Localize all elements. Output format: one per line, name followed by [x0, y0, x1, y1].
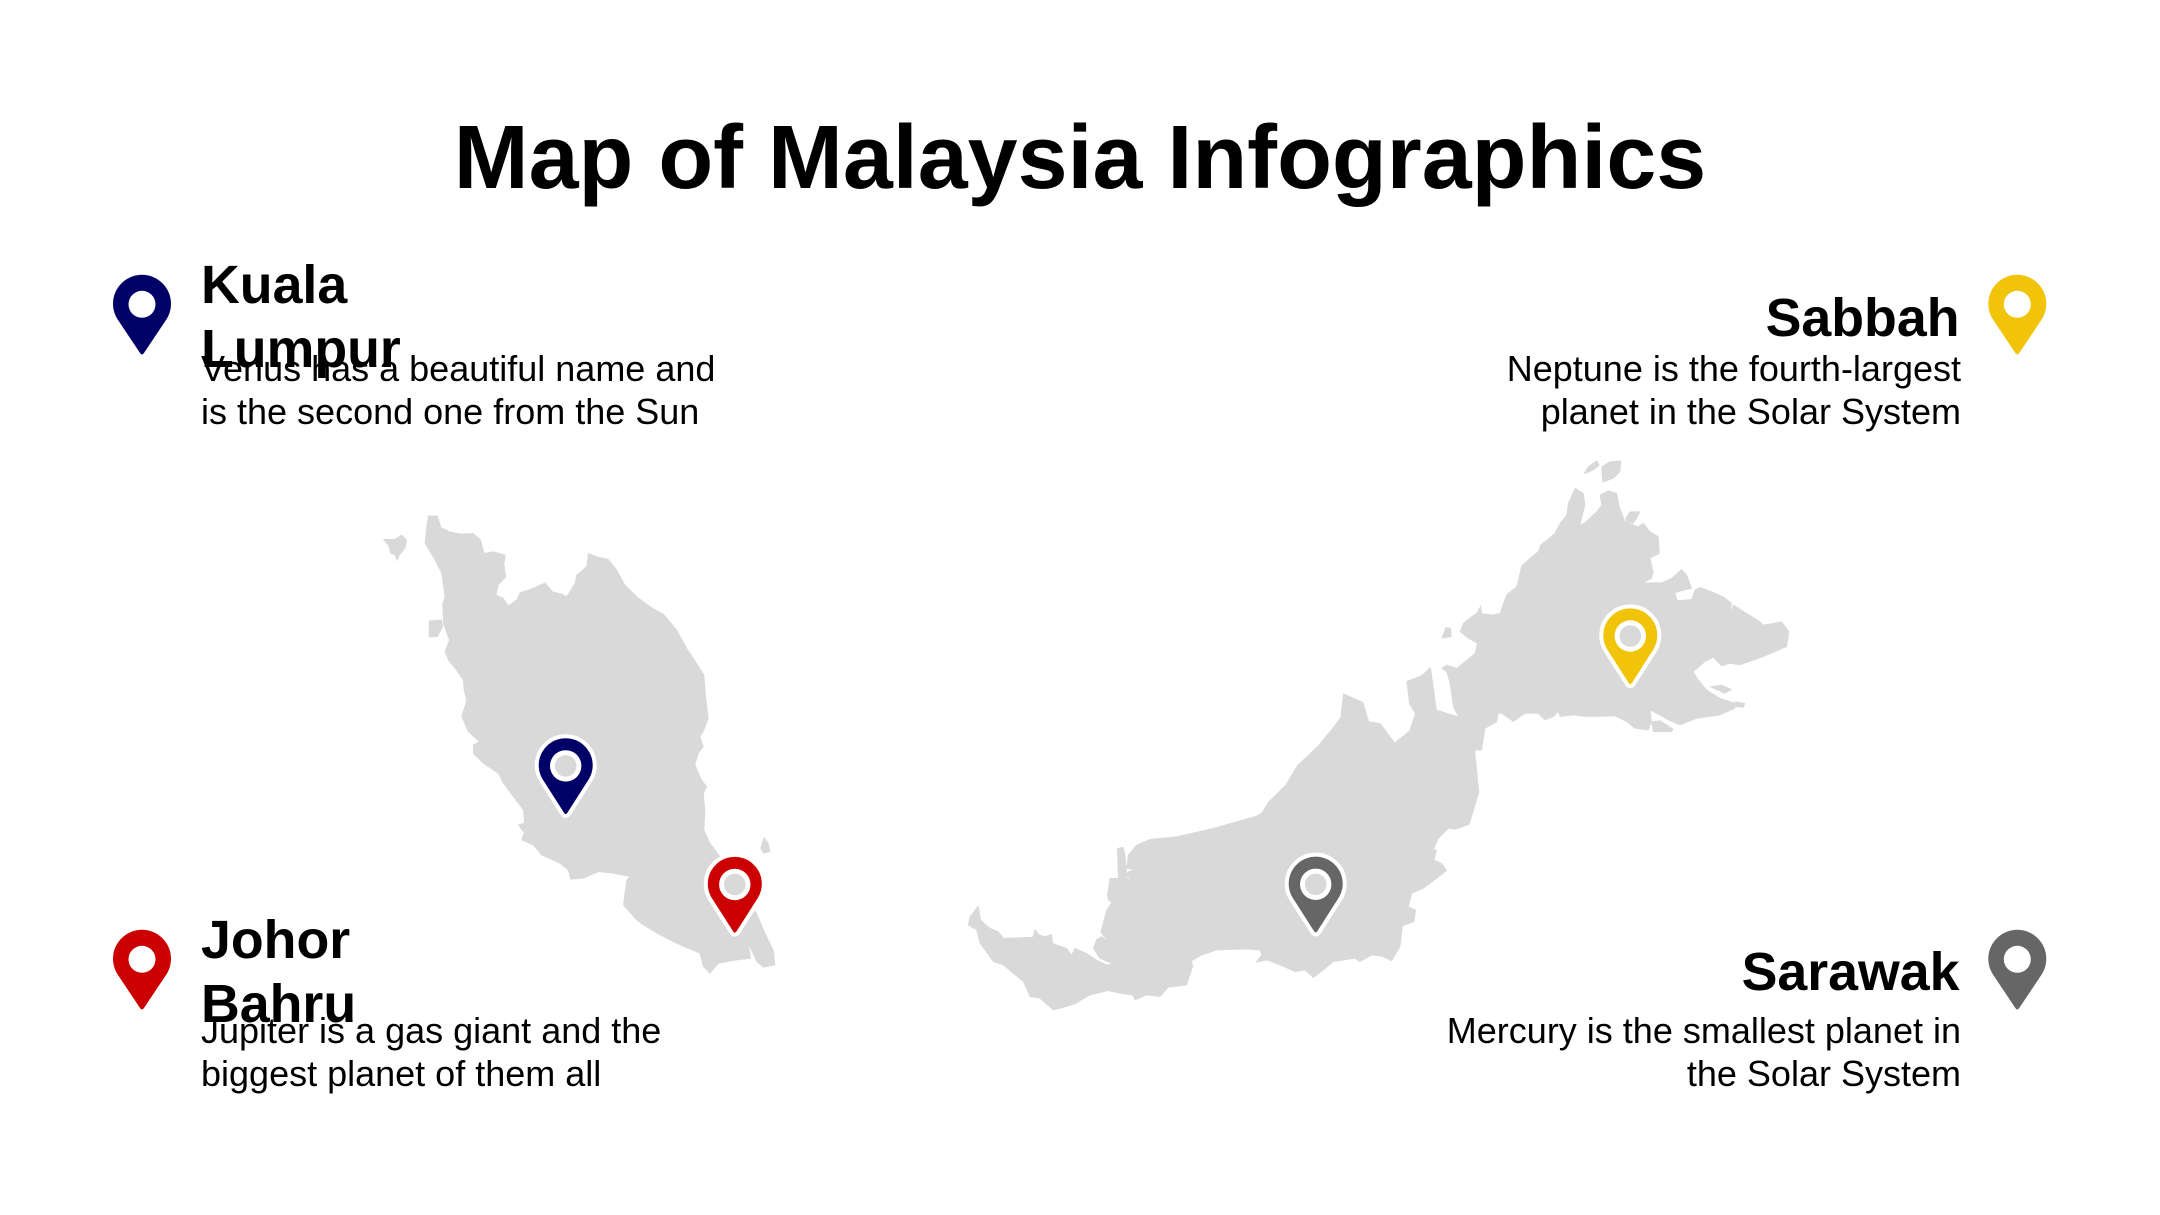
map pin: Sabbah	[1603, 608, 1657, 684]
panel: Kuala Lumpur	[113, 255, 715, 432]
text: Kuala Lumpur description: Venus has a beautiful name and	[201, 348, 715, 389]
text: Johor Bahru description: biggest planet of them all	[201, 1053, 601, 1094]
heading: Johor Bahru: Bahru	[201, 974, 356, 1034]
map pin: Sarawak	[1289, 857, 1343, 932]
map: East Malaysia	[968, 461, 1789, 1010]
map pin: Johor Bahru	[708, 857, 762, 933]
icon: red pin	[113, 930, 171, 1010]
title: Map of Malaysia Infographics	[454, 108, 1706, 208]
heading: Sabbah: Sabbah	[1766, 288, 1960, 348]
text: Sabbah description: planet in the Solar System	[1541, 391, 1961, 432]
text: Johor Bahru description: Jupiter is a gas giant and the	[201, 1010, 661, 1051]
icon: yellow pin	[1988, 275, 2046, 354]
panel: Sabbah	[1507, 275, 2046, 432]
panel: Johor Bahru	[113, 910, 661, 1094]
icon: grey pin	[1988, 930, 2046, 1010]
map pin: Kuala Lumpur	[539, 738, 593, 814]
heading: Kuala Lumpur: Lumpur	[201, 319, 401, 379]
panel: Sarawak	[1447, 930, 2046, 1094]
map: Peninsular Malaysia	[383, 516, 775, 973]
text: Sarawak description: the Solar System	[1687, 1053, 1961, 1094]
text: Sabbah description: Neptune is the fourth-largest	[1507, 348, 1961, 389]
text: Kuala Lumpur description: is the second one from the Sun	[201, 391, 699, 432]
heading: Sarawak: Sarawak	[1742, 942, 1960, 1002]
icon: navy pin	[113, 275, 171, 354]
heading: Johor Bahru: Johor	[201, 910, 350, 970]
text: Sarawak description: Mercury is the smallest planet in	[1447, 1010, 1961, 1051]
heading: Kuala Lumpur: Kuala	[201, 255, 348, 315]
